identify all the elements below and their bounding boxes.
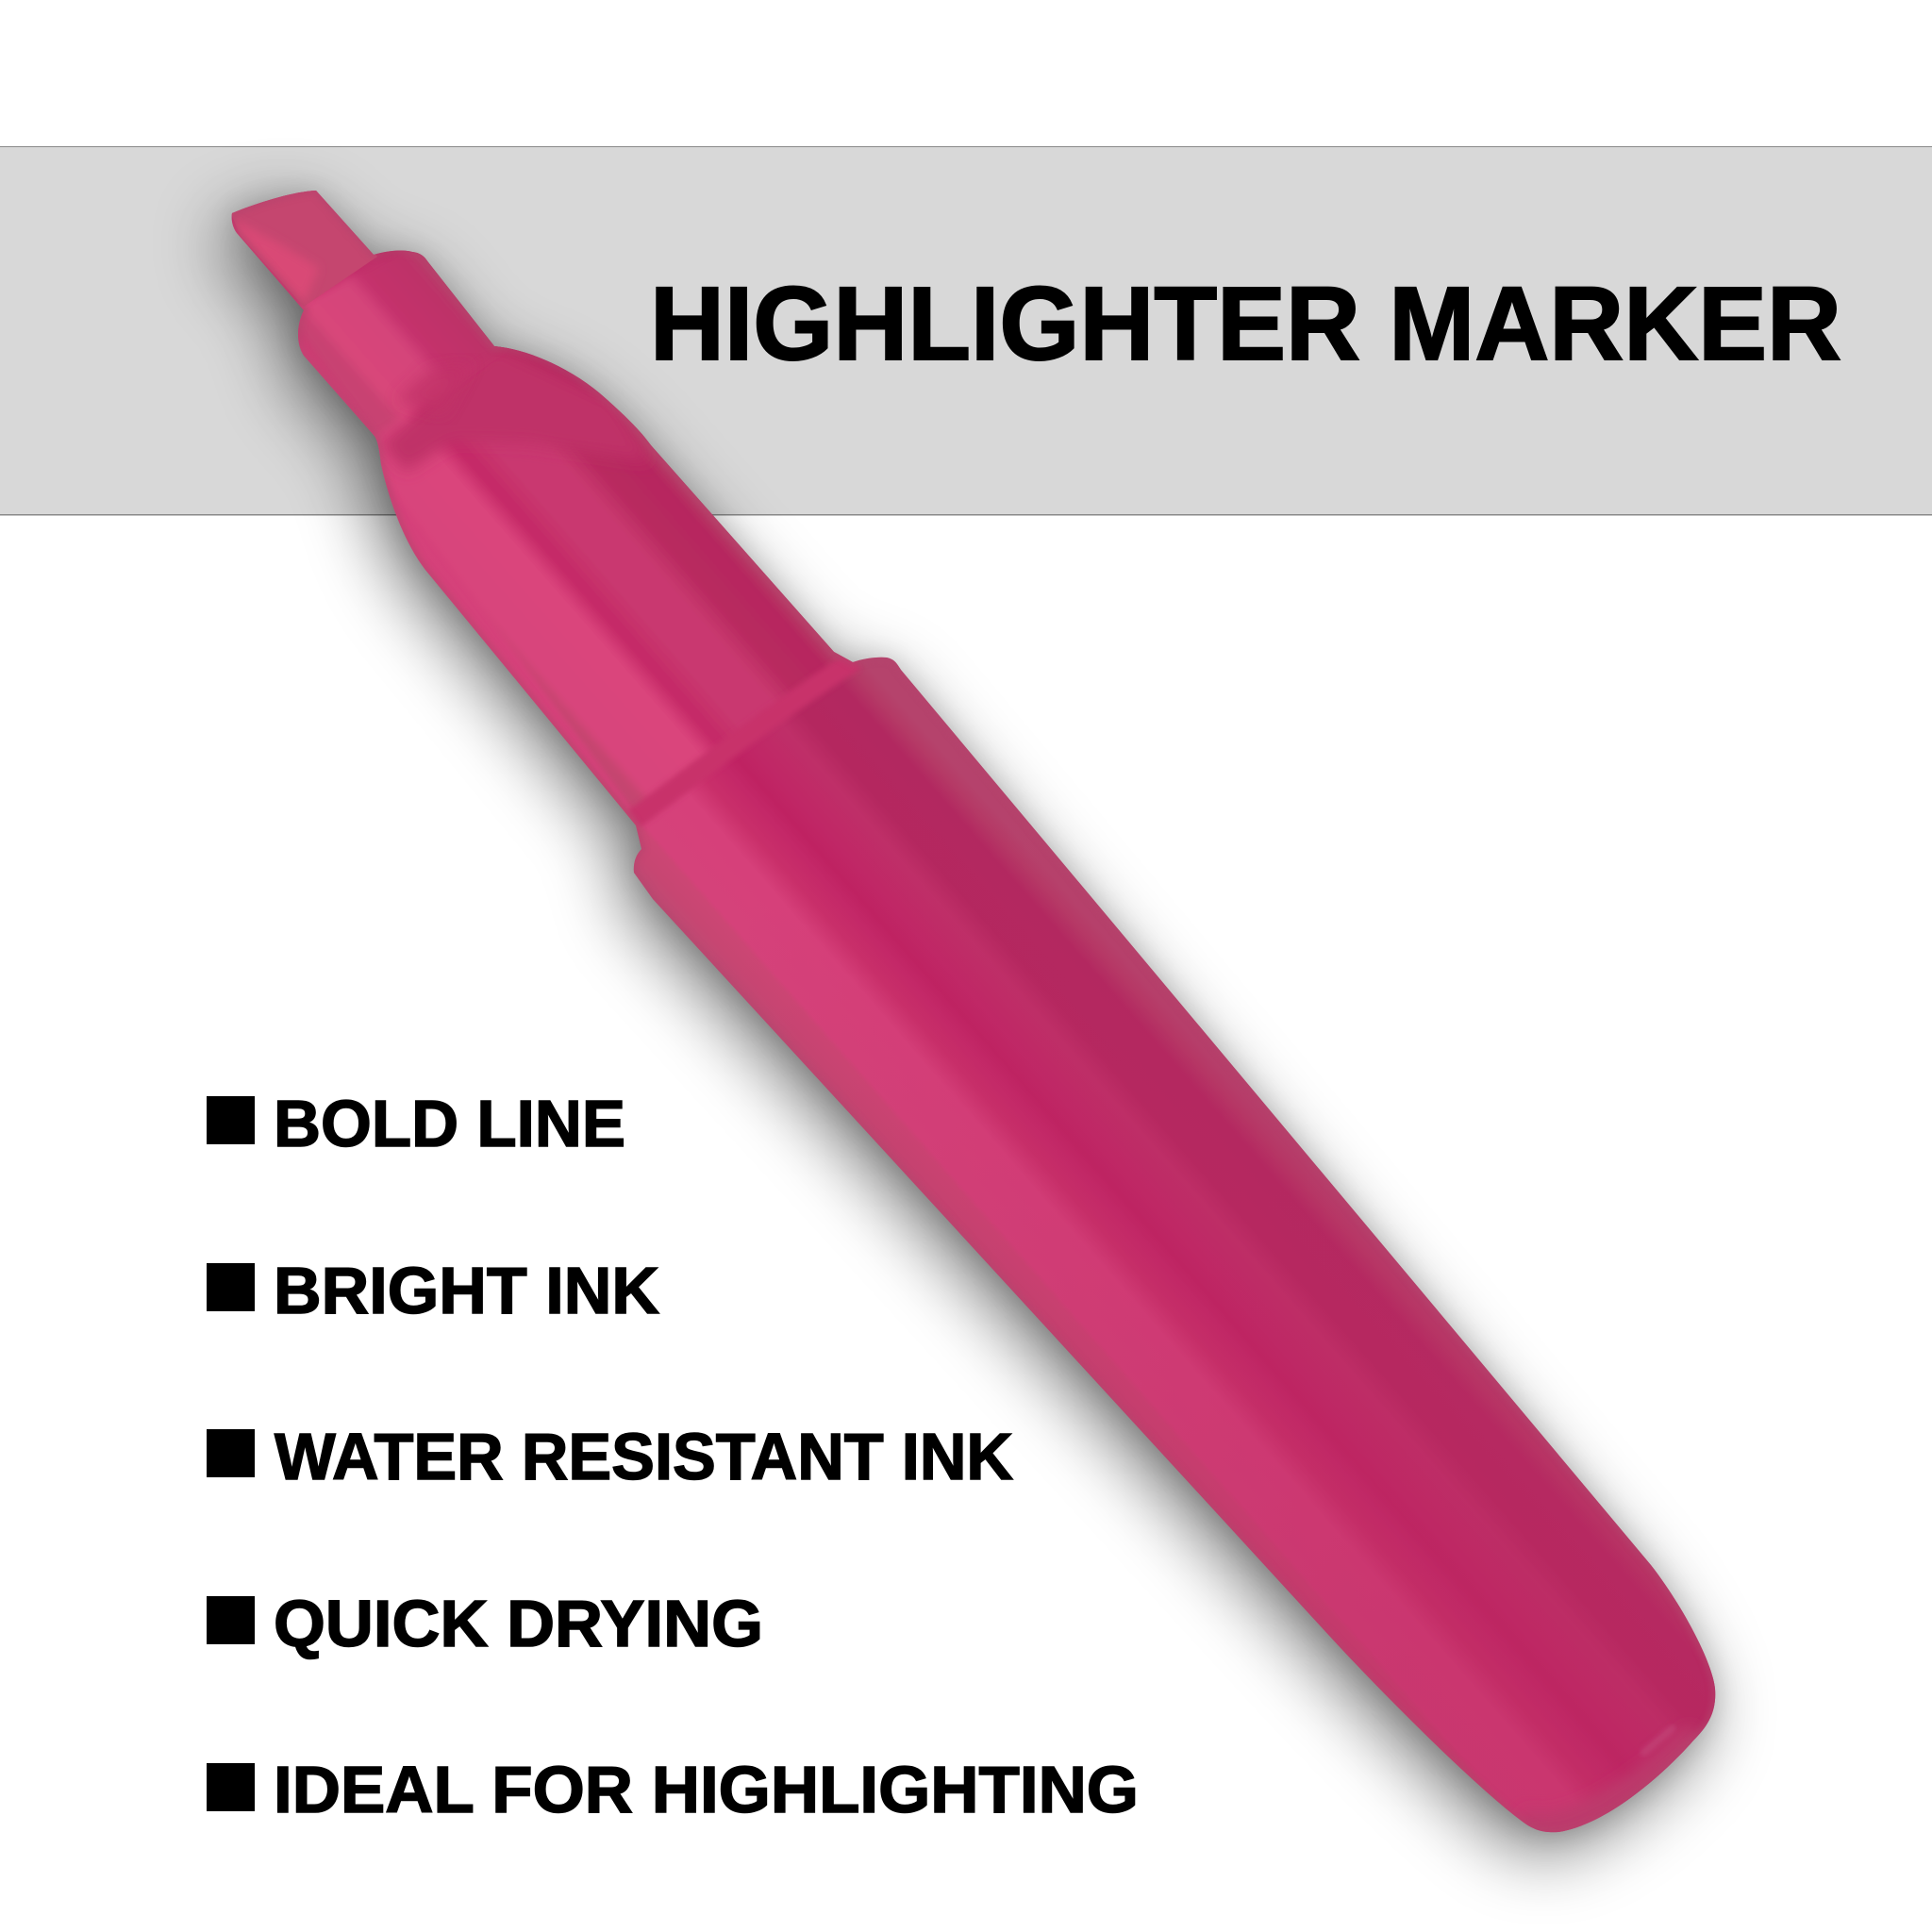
title: HIGHLIGHTER MARKER: [650, 266, 1841, 382]
bullet: ideal for highlighting: IDEAL FOR HIGHLIGHTING: [274, 1753, 1139, 1826]
marker grip section: [358, 330, 863, 821]
chisel tip: [226, 184, 377, 307]
collar base shading: [402, 372, 447, 406]
bullet: water resistant ink: WATER RESISTANT INK: [275, 1420, 1013, 1493]
grip shoulder shading: [383, 362, 636, 471]
highlighter marker: [232, 191, 1715, 1832]
marker end bevel: [1521, 1734, 1698, 1825]
edge shading: [232, 191, 1715, 1832]
cap lengthwise dimming: [1137, 1128, 1715, 1832]
bullet: bold line: BOLD LINE: [274, 1087, 625, 1160]
bullet: bright ink: BRIGHT INK: [274, 1254, 659, 1327]
marker collar: [298, 251, 493, 434]
header band: [0, 146, 1932, 515]
end cap highlight: [1641, 1726, 1674, 1755]
bullet: quick drying: QUICK DRYING: [274, 1587, 763, 1660]
feature list: [207, 1087, 1139, 1826]
cap ring: [634, 660, 855, 819]
marker drop shadow: [220, 191, 1715, 1851]
marker cap barrel: [232, 191, 1715, 1832]
